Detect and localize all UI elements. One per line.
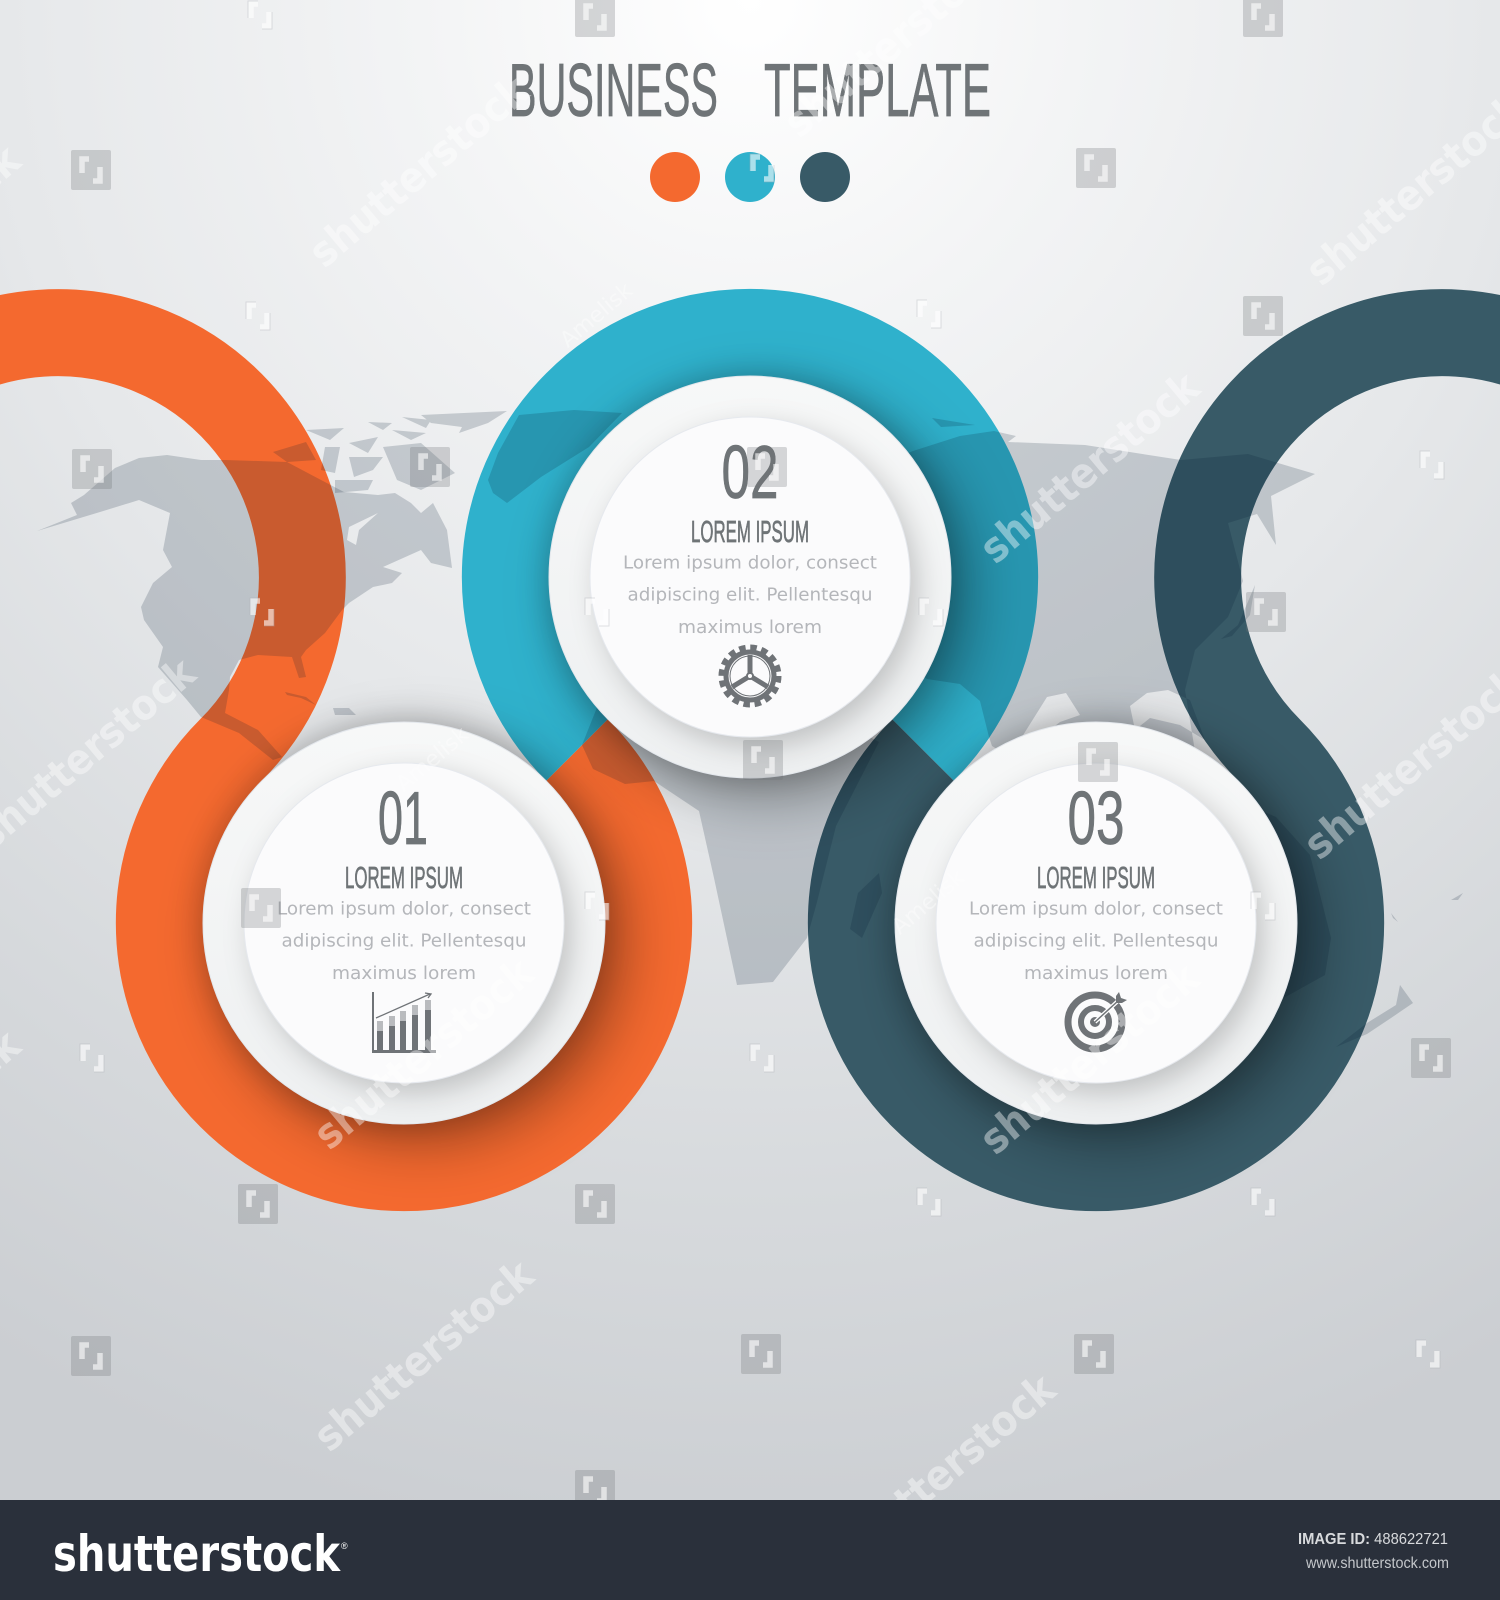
step 03 body text: maximus lorem xyxy=(1024,963,1168,984)
registered mark: ® xyxy=(341,1541,348,1551)
step 01 body text: maximus lorem xyxy=(332,963,476,984)
step 03 number: 03 xyxy=(1068,776,1124,860)
step 01 disc xyxy=(199,718,627,1146)
step 03 body text: Lorem ipsum dolor, consect xyxy=(969,898,1223,920)
watermark text: shutterstock xyxy=(299,65,538,277)
step 02 body text: maximus lorem xyxy=(678,617,822,638)
watermark text: shutterstock xyxy=(304,947,543,1159)
step 02 body text: adipiscing elit. Pellentesqu xyxy=(628,584,872,606)
step 03 disc xyxy=(891,718,1319,1146)
step 01 heading: LOREM IPSUM xyxy=(345,860,463,895)
step 02 disc xyxy=(545,372,973,800)
step 02 number: 02 xyxy=(722,430,778,514)
icon: bar chart xyxy=(372,992,436,1053)
image id: IMAGE ID: 488622721 xyxy=(1298,1531,1448,1548)
step 01 body text xyxy=(277,898,531,984)
step 03 body text xyxy=(969,898,1223,984)
watermark text: Amelisk xyxy=(888,865,970,940)
step 01 body text: adipiscing elit. Pellentesqu xyxy=(282,930,526,952)
title: BUSINESS xyxy=(509,48,718,132)
colour dots xyxy=(650,152,850,202)
step 03 heading: LOREM IPSUM xyxy=(1037,860,1155,895)
icon: target xyxy=(1068,992,1127,1049)
ribbon: teal xyxy=(505,332,995,750)
title: TEMPLATE xyxy=(764,48,991,132)
website: www.shutterstock.com xyxy=(1305,1555,1449,1572)
step 02 body text xyxy=(623,552,877,638)
world map xyxy=(37,410,1463,1047)
step 01 body text: Lorem ipsum dolor, consect xyxy=(277,898,531,920)
watermark text: Amelisk xyxy=(556,278,638,353)
footer logo: shutterstock xyxy=(53,1525,341,1583)
ribbon: dark slate xyxy=(851,333,1500,1168)
watermark text: Amelisk xyxy=(392,722,474,797)
step 02 body text: Lorem ipsum dolor, consect xyxy=(623,552,877,574)
ribbon: orange xyxy=(0,333,649,1168)
icon: gear xyxy=(722,648,778,704)
step 01 number: 01 xyxy=(378,776,428,860)
watermark text: shutterstock xyxy=(826,1363,1065,1575)
watermark text: shutterstock xyxy=(970,361,1209,573)
step 02 heading: LOREM IPSUM xyxy=(691,514,809,549)
step 03 body text: adipiscing elit. Pellentesqu xyxy=(974,930,1218,952)
watermark text: shutterstock xyxy=(970,952,1209,1164)
watermark text: shutterstock xyxy=(304,1249,543,1461)
footer bar xyxy=(0,1500,1500,1600)
